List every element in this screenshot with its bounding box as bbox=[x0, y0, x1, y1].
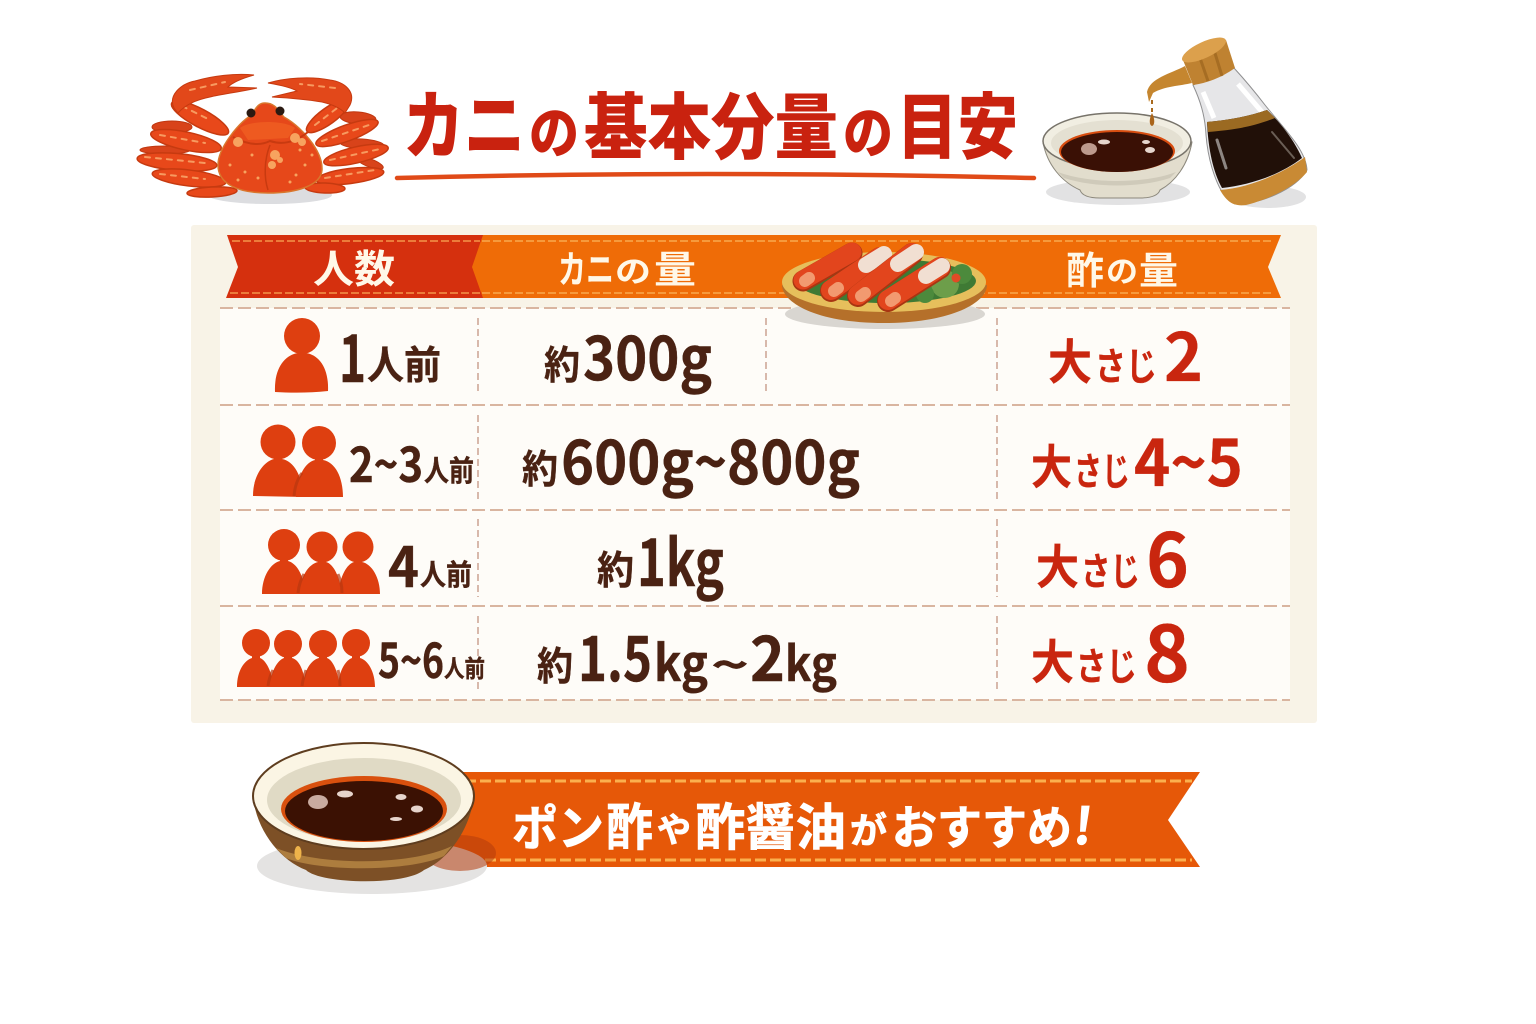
left claw bbox=[172, 74, 257, 113]
row 4 crab amount: ~ bbox=[711, 630, 749, 694]
header ribbon red bbox=[226, 235, 483, 298]
header: crab amount: カニ bbox=[558, 239, 614, 294]
row 4 people icon bbox=[237, 629, 375, 687]
row 3 people label: 人前 bbox=[420, 552, 472, 594]
row 4 crab amount: kg bbox=[654, 624, 708, 696]
row 1 people icon bbox=[275, 318, 328, 393]
row 4 vinegar amount: 大 bbox=[1031, 624, 1074, 693]
header: people: 人数 bbox=[313, 239, 395, 295]
shell bbox=[218, 103, 322, 193]
row 2 vinegar amount: 4~5 bbox=[1134, 413, 1243, 505]
row 2 vinegar amount: 大 bbox=[1031, 429, 1072, 498]
row 3 people label: 4 bbox=[388, 523, 419, 603]
bottle glass bbox=[1193, 68, 1307, 204]
banner text: が bbox=[850, 802, 887, 854]
icon: soy sauce dish and bottle bbox=[1043, 33, 1307, 208]
spout bbox=[1147, 66, 1192, 102]
title bbox=[403, 67, 1018, 174]
row 3 crab amount: 約 bbox=[597, 540, 634, 596]
banner text: おすすめ bbox=[892, 792, 1072, 858]
table grid bbox=[220, 308, 1290, 700]
row 2 crab amount: 600g~800g bbox=[561, 415, 860, 502]
title underline bbox=[397, 174, 1034, 178]
row 4 crab amount: kg bbox=[785, 625, 837, 695]
row 3 vinegar amount: さじ bbox=[1081, 541, 1140, 596]
banner text: 酢 bbox=[606, 788, 653, 860]
header: crab amount bbox=[558, 239, 696, 294]
row 4 crab amount: 約 bbox=[537, 636, 573, 692]
banner text: ! bbox=[1071, 787, 1097, 859]
icon: crab bbox=[136, 74, 390, 204]
banner text: ポン bbox=[512, 789, 604, 859]
drops bbox=[1151, 100, 1153, 104]
row 2 people label: 人前 bbox=[424, 448, 474, 490]
header: crab amount: の bbox=[615, 247, 651, 291]
row 1 people label: 人前 bbox=[367, 335, 441, 391]
row 2 crab amount: 約 bbox=[522, 439, 558, 495]
icon: dipping sauce bowl bbox=[253, 743, 496, 894]
row 4 vinegar amount: 8 bbox=[1144, 593, 1190, 705]
icon: crab plate bbox=[782, 252, 987, 329]
row 3 people label bbox=[388, 523, 472, 603]
banner text bbox=[512, 787, 1097, 860]
row 1 vinegar amount bbox=[1048, 305, 1203, 401]
row 2 vinegar amount bbox=[1031, 413, 1243, 505]
right claw bbox=[268, 78, 352, 113]
row 3 vinegar amount: 大 bbox=[1036, 529, 1079, 598]
header: vinegar amount: 酢 bbox=[1066, 240, 1104, 295]
row 3 vinegar amount: 6 bbox=[1146, 502, 1189, 609]
bottle base bbox=[1220, 157, 1307, 205]
row 1 crab amount: 約 bbox=[544, 335, 580, 391]
row 2 vinegar amount: さじ bbox=[1074, 441, 1130, 496]
banner text: や bbox=[657, 803, 691, 852]
row 4 people label: 5~6 bbox=[378, 622, 444, 692]
panel: quantity table bbox=[191, 225, 1317, 723]
title: 目安 bbox=[897, 69, 1018, 174]
title: 基本分量 bbox=[584, 69, 838, 174]
header: vinegar amount: の bbox=[1106, 247, 1138, 291]
row 2 people label bbox=[349, 426, 474, 496]
row 3 crab amount bbox=[597, 513, 724, 605]
row 2 people icon bbox=[253, 424, 343, 497]
row 3 people icon bbox=[262, 529, 380, 594]
row 2 people label: 2~3 bbox=[349, 426, 423, 496]
row 4 vinegar amount bbox=[1031, 593, 1190, 705]
row 1 crab amount: 300g bbox=[583, 311, 712, 398]
title: カニ bbox=[403, 67, 525, 174]
header: crab amount: 量 bbox=[654, 239, 696, 294]
row 3 vinegar amount bbox=[1036, 502, 1189, 609]
bottle sauce bbox=[1207, 110, 1302, 188]
row 3 crab amount: 1kg bbox=[637, 513, 724, 605]
header: vinegar amount bbox=[1066, 240, 1178, 295]
row 4 crab amount: 1.5 bbox=[578, 610, 652, 699]
header: vinegar amount: 量 bbox=[1139, 240, 1178, 295]
row 1 vinegar amount: 2 bbox=[1164, 305, 1203, 401]
header ribbon orange bbox=[470, 235, 1281, 298]
row 1 people label: 1 bbox=[339, 309, 366, 401]
row 4 vinegar amount: さじ bbox=[1076, 636, 1137, 691]
title: の bbox=[529, 89, 579, 170]
banner: recommendation ribbon bbox=[425, 772, 1200, 867]
title: の bbox=[843, 89, 893, 170]
row 4 crab amount bbox=[537, 610, 837, 699]
row 4 crab amount: 2 bbox=[750, 610, 785, 699]
banner text: 酢醤油 bbox=[695, 788, 846, 860]
cap bbox=[1183, 40, 1235, 85]
row 4 people label: 人前 bbox=[444, 649, 485, 684]
row 1 vinegar amount: さじ bbox=[1095, 336, 1157, 391]
row 1 people label bbox=[339, 309, 441, 401]
row 1 vinegar amount: 大 bbox=[1048, 323, 1092, 393]
